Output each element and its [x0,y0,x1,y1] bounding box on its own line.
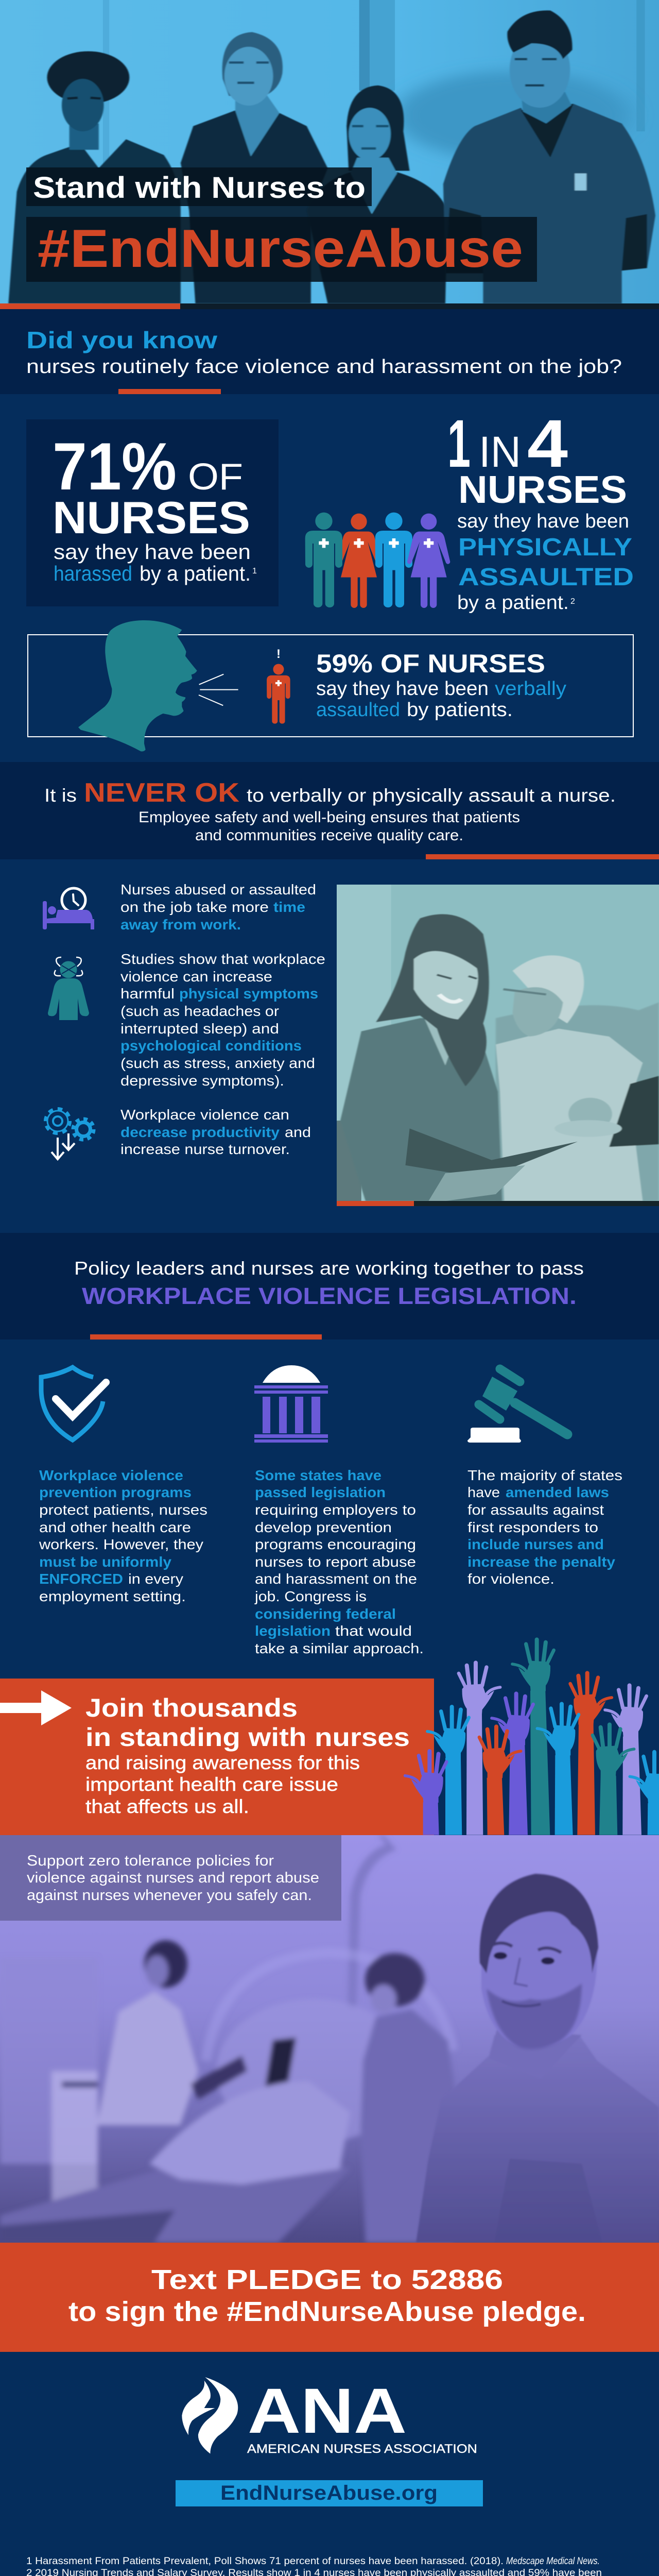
text: amended laws: for violence. [467,1571,554,1587]
text: amended laws: The majority of states [467,1467,622,1483]
text: productivity: Workplace violence can [120,1107,289,1123]
text: prevention programs: in every [128,1571,183,1587]
supporting text: and communities receive quality care. [195,827,463,844]
text: amended laws: for assaults against [467,1502,604,1518]
footnotes: 1 Harassment From Patients Prevalent, Poll Shows 71 percent of nurses have been harassed. (2018). [26,2556,504,2567]
text: passed legislation: take a similar approach. [255,1640,424,1656]
text: symptoms: Studies show that workplace [120,951,325,967]
stat caption [54,540,257,585]
panel: impacts [43,882,659,1206]
patient figure [496,955,658,1201]
text: prevention programs: workers. However, they [39,1536,203,1552]
text: time away: time [273,899,305,915]
icon: flame [182,2377,238,2454]
panel: 71 percent stat [26,419,279,606]
pledge text [68,2264,586,2327]
text: amended laws: increase the penalty [467,1554,615,1570]
text: passed legislation: considering federal [255,1606,396,1622]
text: prevention programs [39,1467,207,1604]
stat number: 71% [53,429,177,504]
pledge text: Text PLEDGE to 52886 [151,2264,503,2295]
text: symptoms: interrupted sleep) and [120,1021,279,1037]
nurse one [8,51,181,303]
panel: hero [0,0,659,309]
text: prevention programs: Workplace violence [39,1467,183,1483]
hero photo: four nurses [0,0,659,309]
icon: raised hands [405,1639,659,1835]
text: passed legislation [254,1467,424,1656]
icon: shout lines [199,674,238,705]
text: prevention programs: and other health care [39,1519,191,1535]
statement: to verbally or physically assault a nurse. [247,785,616,806]
text: passed legislation: Some states have [255,1467,381,1483]
stat caption: say they have been [457,511,629,532]
subheading: nurses routinely face violence and harassment on the job? [26,356,622,378]
text: passed legislation: that would [335,1623,412,1639]
panel: join thousands [0,1639,659,1835]
photo: nurse with elderly patient [337,885,659,1201]
text: amended laws: include nurses and [467,1536,604,1552]
icon: person with symptoms [48,957,89,1020]
supporting text [138,809,520,844]
stat number [447,405,568,481]
accent bar [90,1334,322,1340]
stat text [316,649,566,721]
stat text: say they have been [316,678,489,700]
text: passed legislation: nurses to report abuse [255,1554,416,1570]
text: time away: on the job take more [120,899,269,915]
nurse four [443,10,655,303]
logo wordmark: ANA [248,2376,407,2447]
icon: gears and arrows [45,1109,94,1159]
footnotes: Medscape Medical News. [506,2556,600,2567]
stat highlight [458,534,634,591]
text: time away: away from work. [120,917,241,933]
stat text: verbally [495,678,566,700]
text: symptoms: psychological conditions [120,1038,302,1054]
text: raising awareness [85,1752,360,1817]
text: passed legislation: legislation [255,1623,331,1639]
panel: programs column [39,1367,207,1604]
logo: ANA [182,2376,477,2456]
accent bar [337,1201,659,1206]
text: passed legislation: programs encouraging [255,1536,416,1552]
panel: policy heading [0,1233,659,1340]
stat text: 59% OF NURSES [316,649,545,678]
nurse figure [340,914,502,1201]
heading: workplace violence legislation: WORKPLACE VIOLENCE LEGISLATION. [82,1283,577,1309]
text: symptoms: (such as stress, anxiety and [120,1055,315,1071]
text: productivity: decrease productivity [120,1124,280,1140]
text: productivity: increase nurse turnover. [120,1141,290,1157]
statement: NEVER OK [84,778,239,808]
heading: did you know: Did you know [26,327,217,353]
stat caption end: 2 [570,597,575,606]
panel: footer [26,2376,602,2576]
stat highlight: ASSAULTED [458,564,634,591]
text: amended laws: first responders to [467,1519,598,1535]
heading: join thousands [85,1693,410,1752]
text: symptoms: physical symptoms [179,986,318,1002]
stat number: 1 [447,405,471,481]
pledge text: to sign the #EndNurseAbuse pledge. [68,2296,586,2327]
icon: government building [254,1365,328,1443]
icon: four nurses [305,513,450,608]
text: raising awareness: and raising awareness for this [85,1752,360,1773]
panel: never ok [0,762,659,859]
text: prevention programs: employment setting. [39,1588,186,1604]
statement [44,778,616,808]
photo: nurse in imaging suite [0,1835,659,2243]
heading: join thousands: in standing with nurses [85,1723,410,1752]
accent bar [118,389,221,394]
text: passed legislation: and harassment on the [255,1571,417,1587]
arrow [0,1690,72,1725]
tablet [406,1128,578,1173]
stat text: by patients. [407,699,513,721]
nurse three [307,86,447,303]
text: amended laws: amended laws [506,1484,609,1500]
text: symptoms: violence can increase [120,969,272,985]
stat highlight: PHYSICALLY [458,534,632,561]
icon: nurse under verbal attack: ! [276,647,281,661]
icon: shouting head [78,620,197,751]
text: symptoms: depressive symptoms). [120,1073,284,1089]
nurse two [181,32,327,303]
text: prevention programs: protect patients, nurses [39,1502,207,1518]
text: raising awareness: important health care issue [85,1774,338,1795]
text: prevention programs: ENFORCED [39,1571,123,1587]
text: prevention programs: must be uniformly [39,1554,171,1570]
statement: It is [44,785,77,806]
url banner: EndNurseAbuse.org [220,2482,438,2504]
icon: nurse under verbal attack [267,647,290,724]
callout: zero tolerance: violence against nurses and report abuse [27,1870,319,1886]
callout: zero tolerance: Support zero tolerance policies for [27,1853,274,1869]
icon: gavel [467,1369,567,1443]
stat number: IN [479,428,521,476]
supporting text: Employee safety and well-being ensures that patients [138,809,520,826]
text: amended laws: have [467,1484,500,1500]
panel: 59 percent stat [28,620,633,751]
stat caption: 1 [252,567,257,575]
text: passed legislation: requiring employers to [255,1502,416,1518]
footnotes [26,2556,602,2576]
text: policy leaders: Policy leaders and nurses are working together to pass [74,1258,584,1279]
url banner [176,2480,483,2506]
text: symptoms: (such as headaches or [120,1003,279,1019]
text: prevention programs: prevention programs [39,1484,192,1500]
icon: bed and clock [43,888,94,929]
panel: 1 in 4 stat [305,405,634,614]
panel: amended laws column [467,1369,622,1587]
panel: text pledge [0,2243,659,2352]
heading: hashtag: #EndNurseAbuse [38,219,523,279]
panel: legislation column [254,1365,424,1656]
stat caption end: by a patient. [457,592,569,614]
text: symptoms [120,951,325,1089]
stat nurses: NURSES [458,468,627,511]
text: productivity: and [285,1124,311,1140]
heading: join thousands: Join thousands [85,1693,298,1722]
text: raising awareness: that affects us all. [85,1796,249,1817]
stat nurses: NURSES [53,492,250,543]
text: time away: Nurses abused or assaulted [120,882,316,897]
logo name: AMERICAN NURSES ASSOCIATION [247,2442,477,2456]
text: passed legislation: develop prevention [255,1519,392,1535]
panel: zero tolerance photo [0,1835,659,2243]
callout: zero tolerance [0,1835,341,1921]
stat caption: by a patient. [140,562,251,585]
text: symptoms: harmful [120,986,175,1002]
text: time away [120,882,316,933]
stat of: OF [188,456,243,498]
text: productivity [120,1107,311,1157]
heading: stand with nurses: Stand with Nurses to [33,171,366,205]
panel: did you know [0,309,659,394]
accent bar [426,854,659,859]
stat caption: harassed [54,562,132,585]
icon: shield with check [41,1367,106,1440]
stat caption: say they have been [54,540,251,564]
stat number: 4 [527,405,568,481]
accent bar [0,303,180,309]
text: passed legislation: job. Congress is [254,1588,367,1604]
male nurse figure [416,1874,659,2243]
stat text: assaulted [316,699,400,721]
callout: zero tolerance: against nurses whenever you safely can. [27,1887,312,1904]
text: passed legislation: passed legislation [255,1484,386,1500]
text: amended laws [467,1467,622,1587]
